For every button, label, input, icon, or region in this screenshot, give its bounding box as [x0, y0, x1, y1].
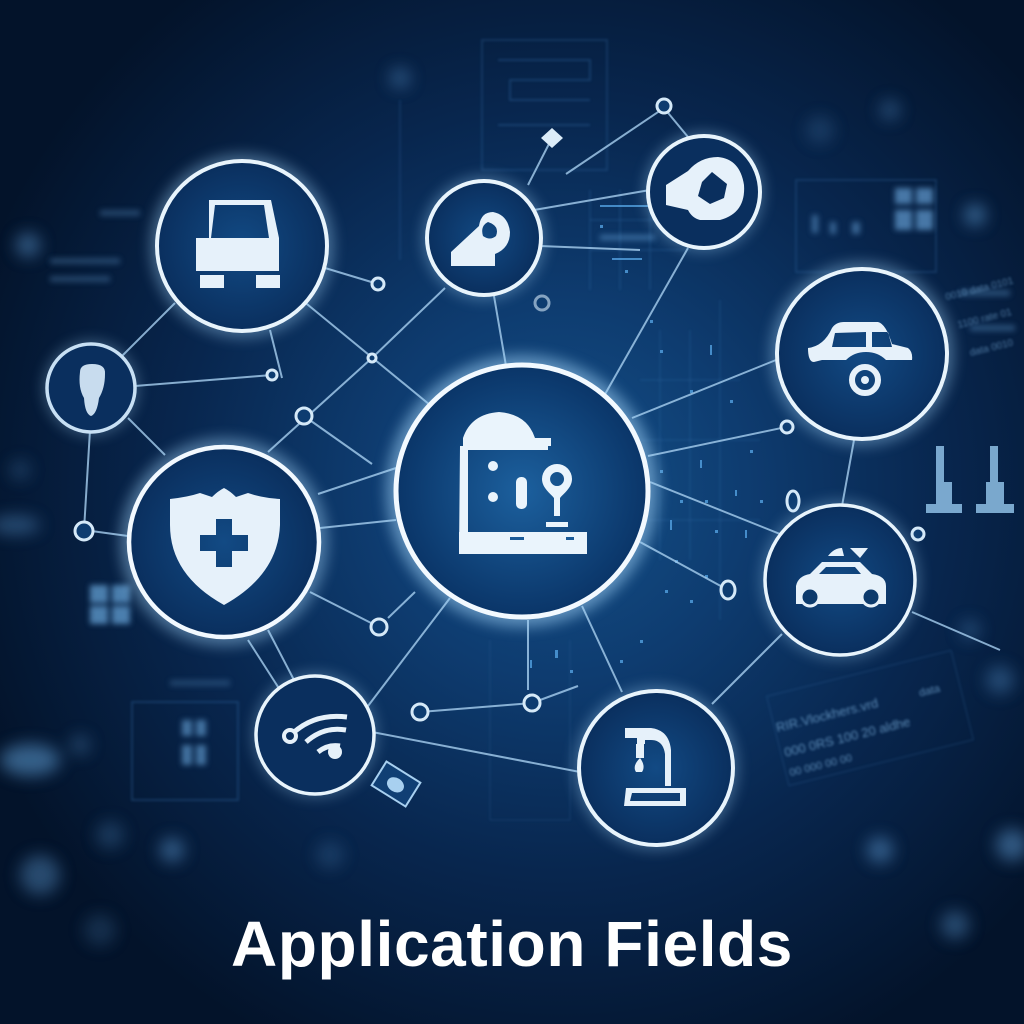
node: health shield — [120, 438, 328, 646]
icon: truck — [196, 200, 279, 271]
node: car with target — [770, 262, 954, 446]
icon: car — [808, 322, 912, 362]
node: wireless — [252, 672, 378, 798]
tilted text top right: 1100 rate 01 — [957, 307, 1013, 331]
node: car — [760, 500, 920, 660]
icon: sensor — [80, 364, 105, 416]
tilted data card — [774, 680, 953, 780]
node: truck front — [150, 154, 334, 338]
node: gear — [644, 132, 764, 252]
tilted text top right: 0010 data 0101 — [944, 276, 1015, 303]
icon: shield with cross — [170, 488, 280, 605]
small blurred chart blocks — [50, 188, 1015, 765]
faint data panels — [132, 40, 973, 820]
node: wearable — [422, 176, 546, 300]
icon: scanner handle — [451, 212, 510, 266]
tilted data card: RIR.Vlockhers.vrd — [774, 695, 880, 735]
right side pillar icons — [926, 446, 1014, 513]
icon: diamond — [541, 128, 563, 148]
hub: centre machine — [386, 355, 658, 627]
tilted data card: 00 000 00 00 — [788, 752, 853, 779]
node: sensor — [43, 340, 139, 436]
node: robot arm — [574, 686, 738, 850]
icon: sedan — [796, 562, 886, 604]
connector lines — [84, 108, 1000, 772]
tilted text top right — [944, 276, 1024, 361]
icon: wireless — [284, 716, 347, 752]
tilted data card: 000 0RS 100 20 aldhe — [783, 714, 912, 760]
icon: robot arm — [625, 728, 671, 786]
icon: machine — [459, 412, 587, 554]
tilted text top right: data 0010 — [969, 337, 1015, 359]
icon: small photo card — [372, 762, 420, 806]
tilted data card: data — [918, 683, 942, 700]
data-field dots — [530, 205, 763, 673]
connector nodes — [75, 99, 924, 720]
icon: gear part — [666, 157, 744, 220]
title: Application Fields — [231, 908, 793, 980]
